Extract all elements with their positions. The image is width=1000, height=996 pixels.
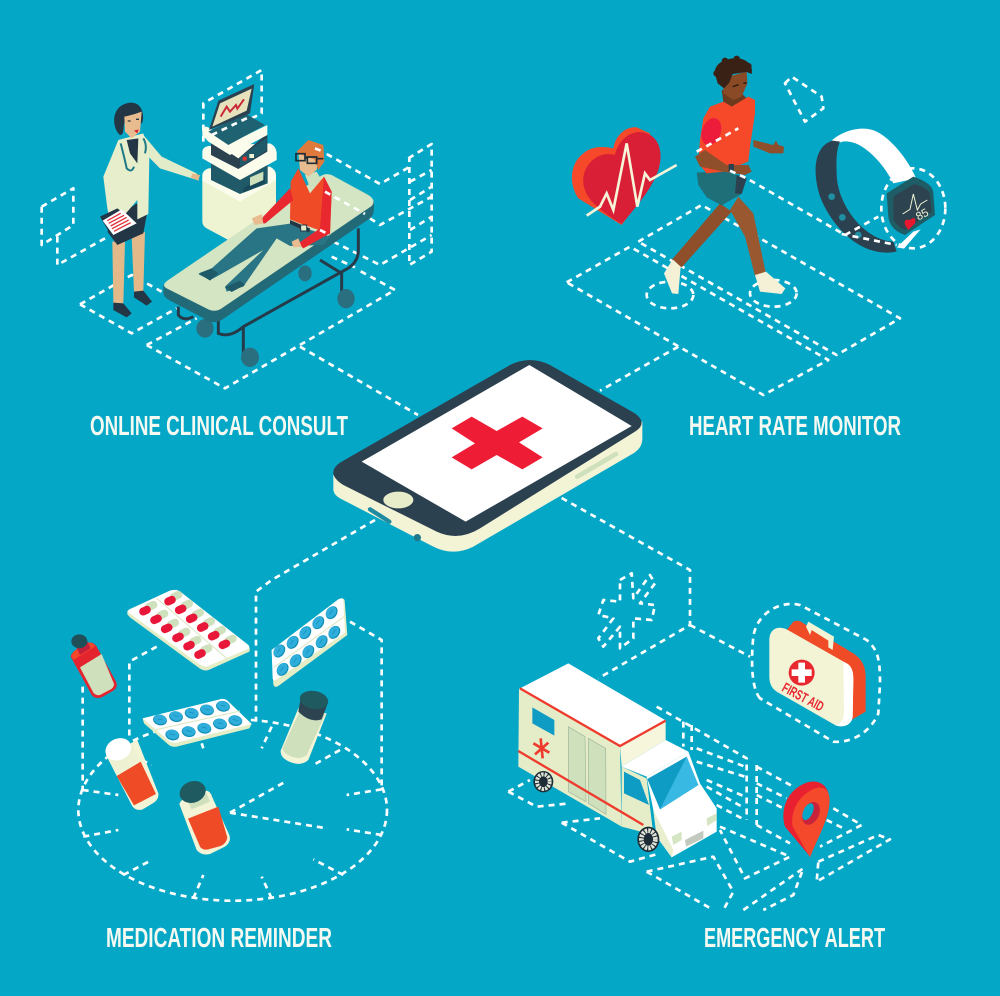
red medical cross bbox=[452, 417, 543, 469]
icon: dark-cap green vial bbox=[281, 689, 330, 764]
panel: online clinical consult bbox=[42, 70, 432, 415]
panel: medication reminder bbox=[71, 520, 387, 901]
dashed isometric guide lines: consult bbox=[42, 70, 432, 415]
dashed dial and connector guides bbox=[78, 520, 387, 901]
blue tablet blister pack: flat bbox=[143, 699, 252, 747]
icon: dark-cap red vial bbox=[176, 777, 230, 854]
panel: emergency alert bbox=[508, 498, 890, 910]
panel: heart rate monitor bbox=[567, 56, 945, 395]
icon: white-cap red vial bbox=[102, 734, 158, 810]
phone body bbox=[333, 360, 642, 552]
heading: heart rate monitor: HEART RATE MONITOR bbox=[689, 410, 901, 441]
icon: first aid kit: FIRST AID bbox=[780, 679, 827, 714]
icon: red syrup bottle bbox=[71, 634, 117, 698]
dashed floor guides: heart rate bbox=[567, 77, 900, 395]
patient bbox=[199, 140, 365, 292]
home button bbox=[383, 492, 413, 508]
stretcher with wheels bbox=[163, 174, 374, 367]
heading: emergency alert: EMERGENCY ALERT bbox=[704, 922, 885, 953]
heading: online clinical consult: ONLINE CLINICAL CONSULT bbox=[90, 410, 348, 441]
central smartphone with medical cross bbox=[333, 360, 642, 552]
icon: first aid kit bbox=[769, 621, 866, 727]
runner bbox=[664, 56, 843, 294]
red capsule blister pack bbox=[127, 590, 250, 671]
icon: smart wristband bbox=[816, 129, 945, 253]
machine: monitor cart bbox=[202, 84, 277, 243]
dashed street and connector guides bbox=[508, 498, 890, 910]
heading: medication reminder: MEDICATION REMINDER bbox=[106, 922, 332, 953]
icon: location pin bbox=[783, 782, 830, 857]
blue tablet blister pack: upright bbox=[271, 598, 347, 687]
icon: heart with pulse bbox=[572, 127, 677, 225]
doctor bbox=[100, 103, 200, 317]
icon: ambulance bbox=[518, 663, 717, 857]
icon: smart wristband: 85 bbox=[914, 207, 931, 223]
